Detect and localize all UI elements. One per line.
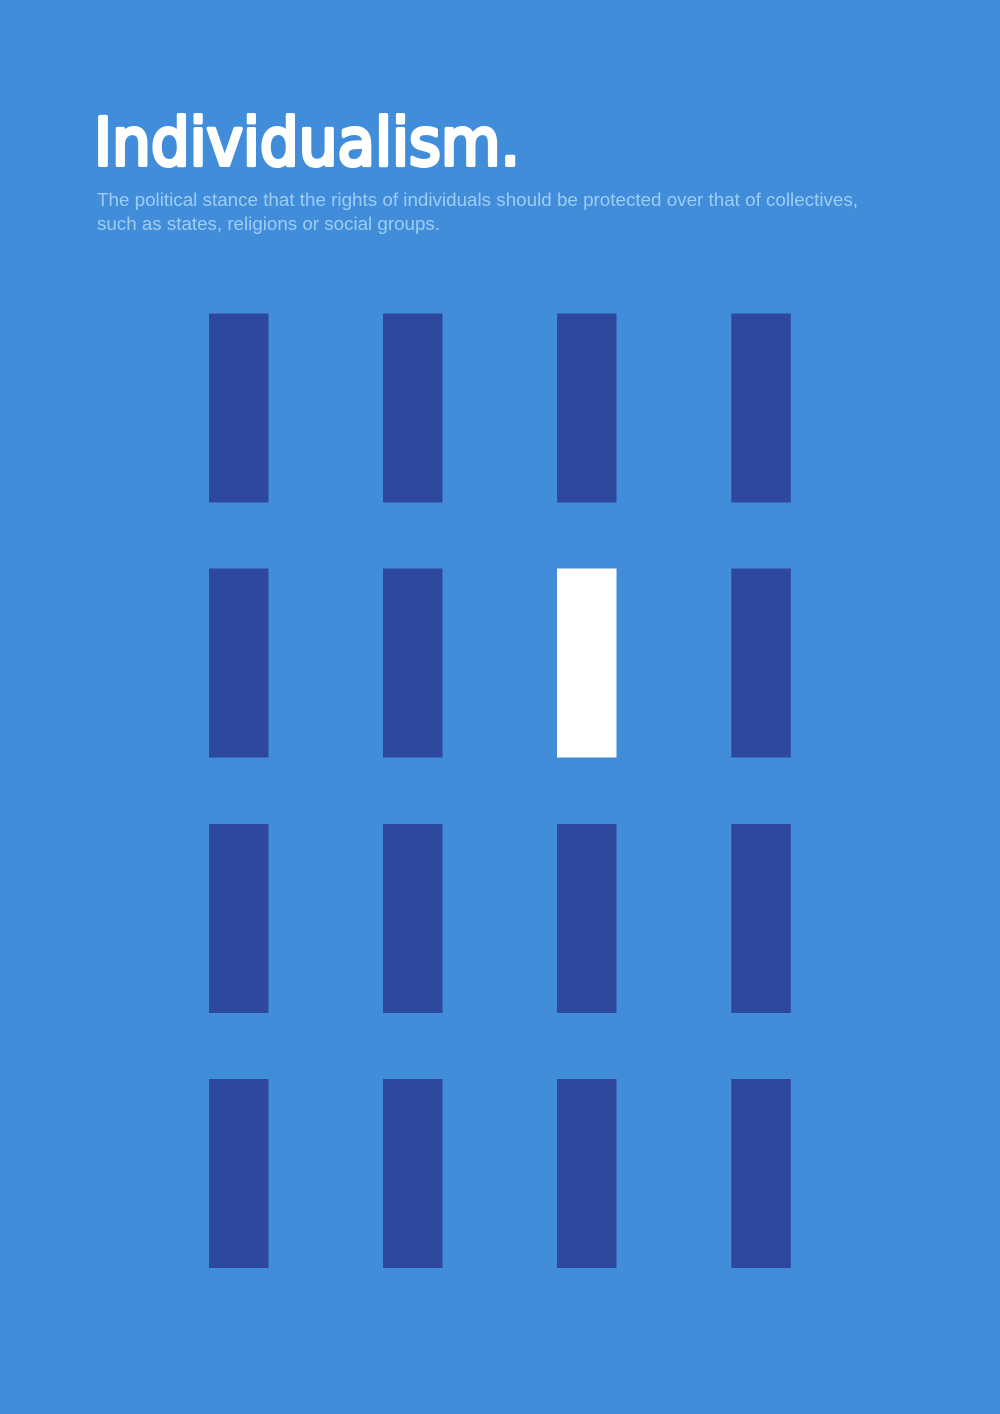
title: Individualism.	[94, 104, 520, 181]
row 2 bars	[209, 568, 791, 758]
row 4 bars	[209, 1079, 791, 1268]
row 3 bars	[209, 824, 791, 1013]
grid of bars: 4 by 4 with one white bar	[209, 314, 791, 1268]
subtitle text block: such as states, religions or social groups.	[97, 213, 440, 234]
row 1 bars	[209, 314, 791, 502]
highlighted white bar: the individual	[557, 568, 616, 758]
subtitle text block	[97, 189, 858, 234]
subtitle text block: The political stance that the rights of individuals should be protected over that of collectives,	[97, 189, 858, 210]
